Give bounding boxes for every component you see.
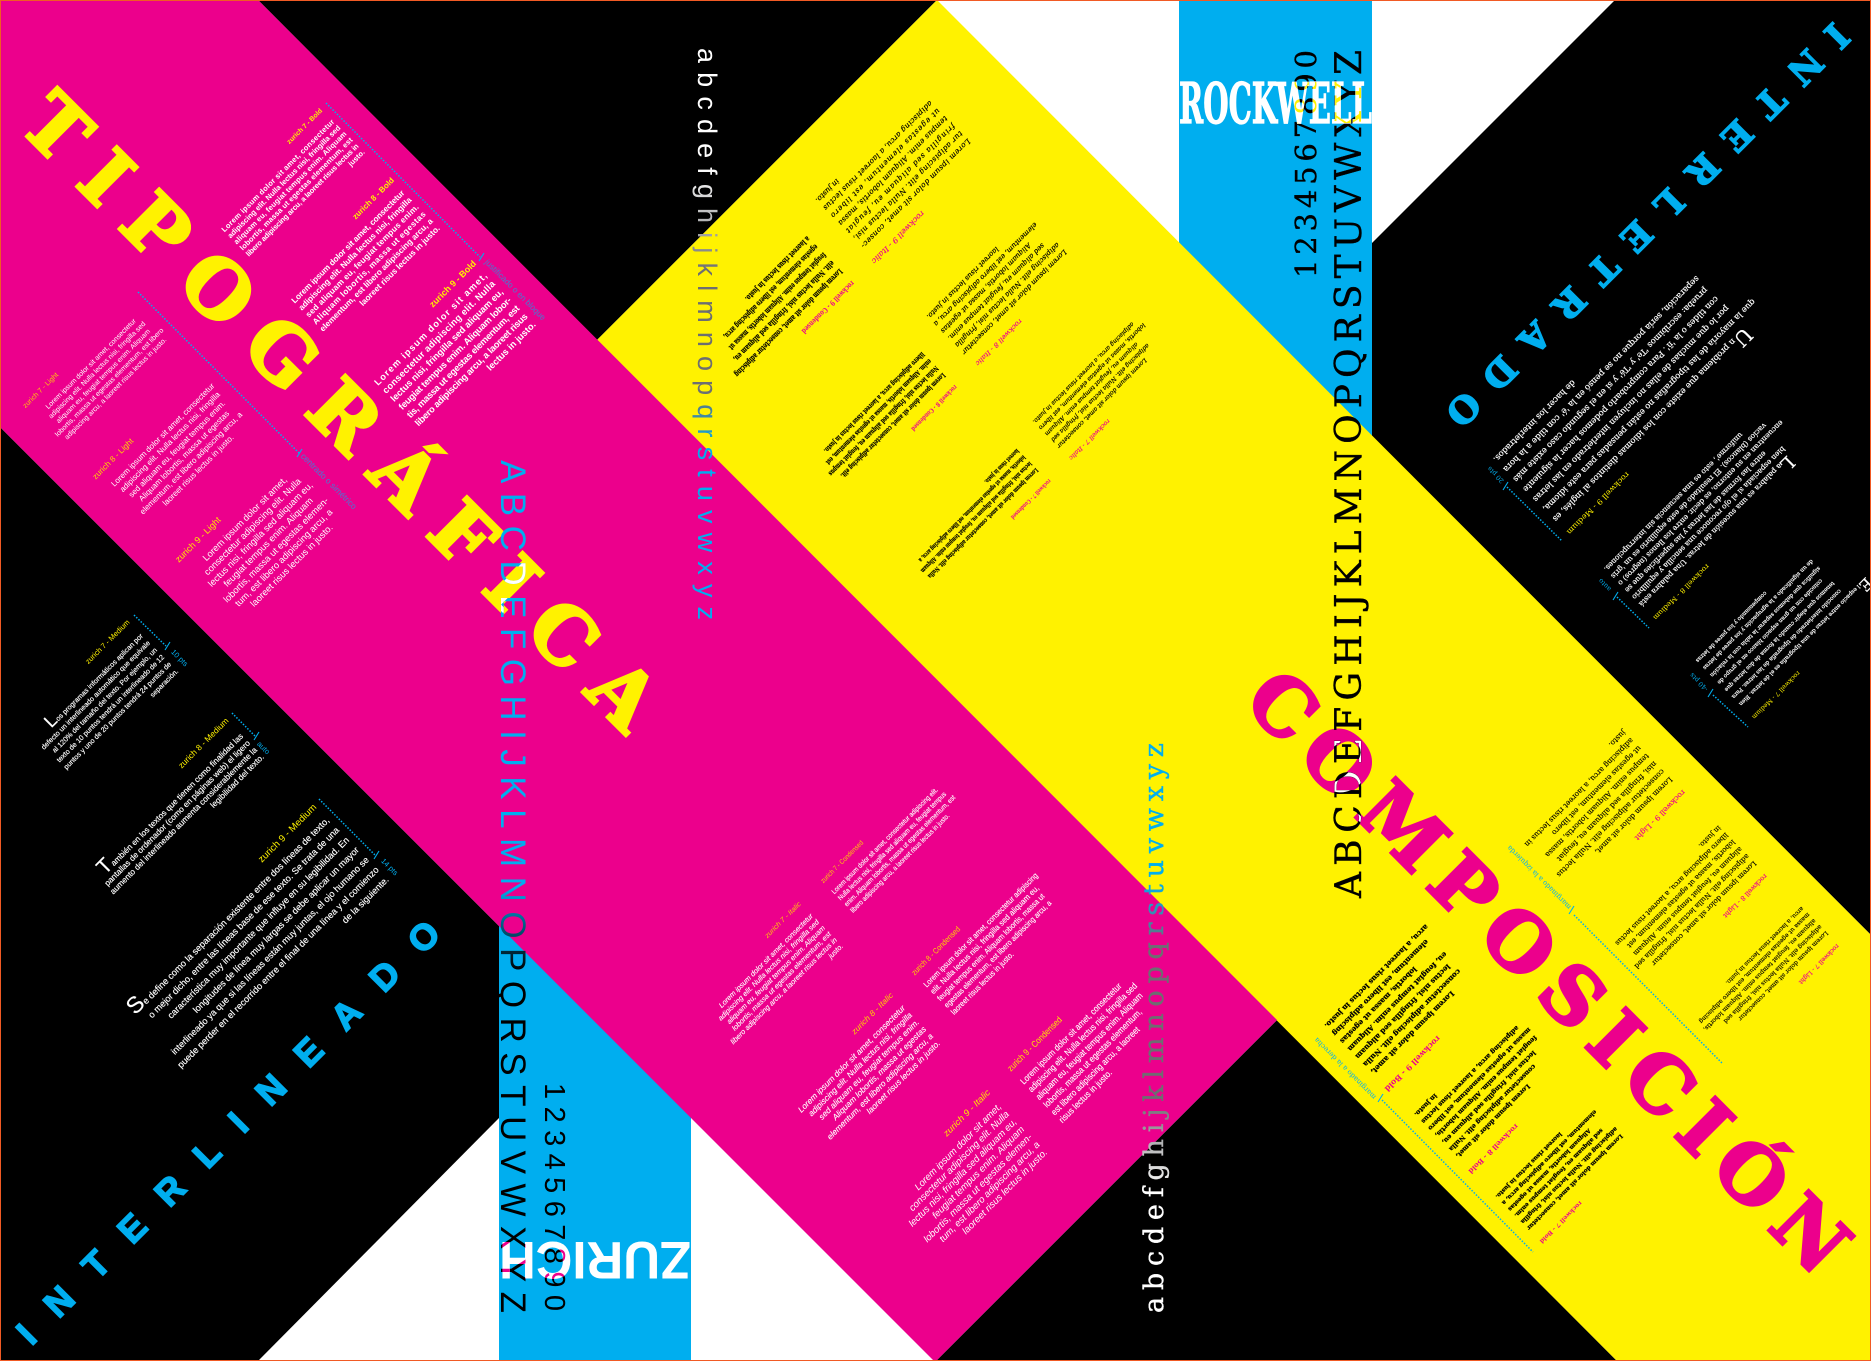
label: 20 pts: 20 pts [1486, 465, 1506, 485]
text block: zurich 9 italic [891, 1101, 1050, 1260]
label: zurich 9 medium: zurich 9 - Medium [256, 802, 319, 865]
text block: rockwell 9 condensed [700, 234, 844, 379]
text block: rockwell 8 light: Lorem ipsum dolor sit amet, consectetur [1649, 859, 1758, 968]
blue bar: zurich [499, 920, 691, 1361]
text block: zurich 8 condensed: Lorem ipsum dolor sit amet, consectetur adipiscing [922, 871, 1040, 989]
label: zurich 8 italic: zurich 8 - Italic [849, 991, 895, 1037]
text block: rockwell 9 medium: que la mayoría de las tipografías no están pensadas para este idioma, [1541, 297, 1758, 514]
text block: zurich 9 medium: interlineado ya que si las líneas están muy juntas, el ojo humano se [169, 855, 371, 1057]
overlap: rockwell characters: ABCDEFGHIJKLMNOPQRSTUVWXYZ [1329, 50, 1370, 899]
text block: rockwell 7 bold: sed aliquam eu, feugiat tempus enim. [1513, 1127, 1604, 1218]
label: auto: auto [255, 739, 272, 756]
text block: zurich 8 light [109, 381, 252, 524]
text block: rockwell 8 italic: adipiscing elit. Nulla lectus nisi, fringilla [953, 241, 1061, 349]
label: zurich 8 condensed: zurich 8 - Condensed [910, 925, 962, 977]
text block: rockwell 9 condensed: Lorem ipsum dolor sit amet, consectetur adipiscing [732, 267, 844, 379]
text block: rockwell 7 light: massa ut egestas elementum, est libero adipiscing [1697, 911, 1811, 1025]
text block: zurich 7 medium: Los programas informáticos aplican por [40, 632, 145, 731]
text block: rockwell 7 medium: coincide con un gran espacio blanco en el grupo de [1715, 577, 1823, 685]
text block: rockwell 8 medium: vacíos (blancos). El resultado de este equilibrio es un 'gris [1609, 420, 1769, 581]
panel: interletrado [1372, 0, 1871, 935]
overlap: zurich characters [502, 1242, 566, 1279]
label: rockwell 8 medium: rockwell 8 - Medium [1651, 562, 1711, 622]
text block: zurich 7 medium: al 120% del tamaño del texto. Por ejemplo, un [51, 646, 159, 755]
text block: rockwell 8 condensed: Nulla lectus nisi, fringilla sed aliquam eu, feugiat tempus [827, 364, 941, 478]
text block: rockwell 8 bold: massa ut egestas elementum, est libero [1426, 1026, 1533, 1132]
text block: zurich 7 medium: texto de 10 puntos tendrá un interlineado de 12 [55, 653, 166, 764]
title: rockwell: ROCKWELL [1179, 71, 1372, 137]
text block: zurich 9 bold: tis, massa ut egestas elementum, est [405, 303, 522, 420]
text block: rockwell 9 bold [1323, 923, 1477, 1077]
text block: zurich 7 italic: Lorem ipsum dolor sit amet, consectetur [717, 911, 815, 1010]
measure: 10 pts [134, 615, 170, 650]
text block: zurich 7 italic: justo. [826, 942, 845, 961]
text block: rockwell 7 italic [1030, 316, 1165, 450]
alphabet: zurich uppercase: ABCDEFGHIJKLMNOPQRSTUVWXYZ [493, 460, 532, 1313]
text block: rockwell 9 light: nisi, fringilla sed aliquam eu, feugiat [1555, 759, 1659, 863]
measure: marginado a la izquierda [1569, 906, 1722, 1063]
text block: zurich 7 italic: libero adipiscing arcu, a laoreet risus lectus in [728, 936, 839, 1046]
overlap: uppercase over tipográfica: ABCDEFGHIJKLMNOPQRSTUVWXYZ [493, 460, 532, 1313]
label: zurich 7 condensed: zurich 7 - Condensed [820, 840, 865, 885]
text block: zurich 8 condensed: elit. Nulla lectus nisi, fringilla sed aliquam eu, [929, 884, 1041, 996]
heading: composición: COMPOSICIÓN [1228, 652, 1868, 1292]
overlap: zurich characters: ABCDEFGHIJKLMNOPQRSTUVWXYZ [493, 460, 532, 1313]
text block: zurich 8 bold: elementum, est libero adipiscing arcu, a [317, 216, 435, 333]
text block: rockwell 8 medium: bien espaciada si el ojo reconoce una sencilla y equilibrio [1630, 445, 1787, 602]
text block: zurich 7 condensed: enim. Aliquam lobortis, massa ut egestas elementum, est [843, 794, 957, 908]
text block: zurich 9 medium: o mejor dicho, entre las líneas base de ese texto. Se trata de una [146, 825, 342, 1020]
text block: zurich 7 medium [26, 625, 181, 780]
text block: rockwell 8 italic [924, 212, 1069, 356]
text block: rockwell 9 condensed: a laoreet risus lectus in justo. [743, 234, 812, 303]
text block: zurich 8 light: adipiscing elit. Nulla lectus nisi, fringilla [118, 390, 222, 494]
text block: zurich 9 bold [372, 270, 538, 436]
text block: rockwell 7 bold: adipiscing elit. Nulla lectus nisi, fringilla [1519, 1125, 1618, 1224]
label: zurich 7 italic: zurich 7 - Italic [763, 901, 803, 941]
text block: zurich 7 italic: adipiscing elit. Nulla lectus nisi, fringilla sed [716, 917, 822, 1023]
measure: -40 pts [1708, 689, 1748, 727]
text block: zurich 7 condensed: Nulla lectus nisi, fringilla sed aliquam eu, feugiat tempus [837, 791, 948, 902]
text block: zurich 8 light: Aliquam lobortis, massa ut egestas [137, 409, 231, 503]
label: justificado o en bloque: justificado o en bloque [482, 256, 548, 322]
text block: rockwell 7 condensed: laoreet risus in justo. [983, 447, 1020, 485]
measure: 20 pts [1503, 482, 1562, 541]
text block: rockwell 9 medium: de hacer los interletrados. [1491, 378, 1578, 465]
panel: interlineado [0, 427, 499, 1361]
text block: zurich 7 bold: Lorem ipsum dolor sit amet, consectetur [220, 117, 336, 234]
text block: rockwell 8 medium [1602, 404, 1813, 615]
label: zurich 8 light: zurich 8 - Light [91, 436, 136, 481]
text block: zurich 8 italic: Aliquam lobortis, massa ut egestas [829, 1024, 928, 1123]
text block: rockwell 9 bold: elementum, est libero adipiscing [1330, 938, 1431, 1038]
heading: tipográfica: TIPOGRÁFICA [3, 75, 678, 750]
text block: zurich 7 condensed: libero adipiscing arcu, a laoreet risus lectus in justo. [850, 813, 951, 914]
text block: rockwell 8 condensed: Lorem ipsum dolor sit amet, consectetur adipiscing elit. [839, 371, 948, 480]
label: rockwell 7 medium: rockwell 7 - Medium [1750, 669, 1801, 720]
text block: zurich 8 medium: aumento del interlineado aumenta considerablemente la [108, 745, 259, 896]
text block: rockwell 8 light: adipiscing elit. Nulla lectus nisi, fringilla sed [1632, 852, 1751, 971]
measure: 14 pts [319, 799, 379, 859]
text block: rockwell 9 bold: consectetur adipiscing elit. Nulla [1361, 967, 1463, 1069]
label: zurich 7 bold: zurich 7 - Bold [286, 108, 324, 146]
text block: rockwell 9 italic: adipiscing arcu, a laoreet risus lectus [821, 99, 934, 212]
text block: rockwell 8 medium: La palabra es una sucesión de letras. Una palabra está [1637, 451, 1799, 609]
text block: zurich 7 condensed: Lorem ipsum dolor sit amet, consectetur adipiscing elit. [831, 787, 940, 896]
overlap: rockwell characters [1294, 82, 1361, 124]
text block: zurich 9 condensed: adipiscing elit. Nulla lectus nisi, fringilla sed [1026, 981, 1139, 1094]
text block: rockwell 9 light [1515, 728, 1675, 888]
label: zurich 7 light: zurich 7 - Light [22, 372, 60, 410]
text block: zurich 8 medium: legibilidad del texto. [209, 753, 266, 810]
text block: zurich 9 condensed: Lorem ipsum dolor sit amet, consectetur [1018, 981, 1124, 1086]
text block: zurich 8 condensed: laoreet risus lectus in justo. [949, 950, 1016, 1017]
text block: rockwell 9 bold: lectus nisi, fringilla sed aliquam [1353, 962, 1452, 1061]
measure: centrado o simétrico [138, 292, 302, 457]
measure: marginado a la derecha [1378, 1094, 1533, 1252]
alphabet: rockwell lowercase: abcdefghijklmnopqrstuvwxyz [1139, 743, 1170, 1313]
text block: zurich 9 condensed: lobortis, massa ut egestas elementum, [1041, 1007, 1144, 1109]
text block: zurich 7 light [36, 309, 172, 445]
text block: rockwell 9 light: tempus enim. Aliquam lobortis, massa [1543, 752, 1651, 860]
text block: rockwell 9 condensed: egestas elementum, est libero adipiscing arcu, [722, 243, 820, 341]
panel: composición [597, 0, 1871, 1361]
text block: zurich 9 italic: lectus nisi, fringilla sed aliquam eu, [907, 1117, 1019, 1229]
text block: rockwell 9 medium: con tildes o la 'ñ'. Para comprobarlo podemos hacer la siguiente [1521, 294, 1721, 494]
text block: rockwell 8 condensed [813, 350, 948, 485]
text block: zurich 7 medium: defecto un interlineado automático que equivale [40, 639, 152, 751]
text block: zurich 9 medium: Se define como la separación existente entre dos líneas de texto, [120, 815, 331, 1019]
text block: rockwell 9 italic [813, 91, 973, 250]
text block: rockwell 9 light: adipiscing arcu, a laoreet risus lectus in [1523, 736, 1636, 849]
text block: zurich 9 bold: consectetur adipiscing elit. Nulla [380, 278, 498, 396]
numerals: rockwell: 1234567890 [1289, 50, 1323, 278]
text block: zurich 8 light: Lorem ipsum dolor sit amet, consectetur [109, 381, 217, 488]
text block: zurich 9 italic: consectetur adipiscing elit. Nulla [907, 1109, 1012, 1214]
text block: zurich 7 bold [220, 117, 367, 264]
heading: interletrado: INTERLETRADO [1437, 14, 1857, 434]
text block: rockwell 9 medium [1491, 248, 1775, 532]
text block: zurich 8 bold [289, 187, 442, 341]
text block: zurich 9 medium: puede perder en el recorrido entre el final de una línea y el comienzo [175, 865, 381, 1070]
text block: zurich 7 italic: lobortis, massa ut egestas elementum, est [730, 929, 834, 1033]
text block: zurich 8 italic: Lorem ipsum dolor sit amet, consectetur [796, 1002, 908, 1114]
panel: tipográfica [0, 0, 1277, 1361]
label: zurich 9 italic: zurich 9 - Italic [940, 1087, 993, 1139]
text block: rockwell 7 italic: adipiscing elit. Nulla lectus nisi, fringilla sed [1049, 342, 1151, 443]
text block: rockwell 7 medium: compensando y los pares de letras [1694, 590, 1768, 663]
text block: rockwell 7 condensed: Lorem ipsum dolor sit amet, consectetur adipiscing elit. Nulla [926, 466, 1039, 579]
text block: rockwell 7 medium: de un significado a la agrupación y los pares de letras [1701, 558, 1815, 671]
label: zurich 7 medium: zurich 7 - Medium [83, 618, 132, 666]
text block: rockwell 9 medium: prueba: escribimos 'Te' y 'Té' y si en el segundo caso existe más [1511, 285, 1710, 484]
label: rockwell 9 condensed: rockwell 9 - Condensed [799, 279, 856, 336]
text block: rockwell 9 light: consectetur adipiscing elit. Nulla lectus [1555, 767, 1667, 879]
text block: zurich 7 medium: separación. [149, 668, 180, 699]
text block: rockwell 9 bold: eu, feugiat tempus enim. Aliquam [1346, 950, 1449, 1054]
text block: rockwell 8 italic: sed aliquam eu, feugiat tempus enim. [946, 242, 1046, 342]
text block: zurich 7 light: adipiscing arcu, a laoreet risus lectus in justo. [64, 337, 168, 441]
text block: rockwell 9 italic: in justo. [814, 177, 841, 205]
text block: zurich 8 bold: laoreet risus lectus in justo. [357, 223, 442, 308]
label: rockwell 8 light: rockwell 8 - Light [1721, 872, 1769, 920]
text block: rockwell 8 bold: Lorem ipsum dolor sit amet, [1454, 1082, 1532, 1160]
text block: rockwell 7 bold: laoreet risus lectus in justo. [1494, 1130, 1562, 1199]
measure: justificado o en bloque [326, 103, 484, 261]
text block: rockwell 7 bold [1493, 1100, 1624, 1231]
text block: zurich 8 italic: sed aliquam eu, feugiat tempus enim. [817, 1017, 921, 1122]
text block: rockwell 7 light [1689, 905, 1829, 1045]
text block: rockwell 9 italic: ut egestas elementum, est libero [829, 107, 942, 220]
text block: rockwell 7 condensed: lobortis, massa ut egestas elementum, est libero adipiscing arcu, a [917, 454, 1027, 563]
label: rockwell 9 italic: rockwell 9 - Italic [869, 209, 926, 266]
text block: rockwell 8 bold: lectus nisi, fringilla sed aliquam eu, [1440, 1049, 1537, 1146]
text block: rockwell 9 bold: lobortis, massa ut egestas [1338, 965, 1419, 1046]
text block: rockwell 7 italic: Lorem ipsum dolor sit amet, consectetur [1055, 356, 1149, 450]
text block: zurich 8 condensed: feugiat tempus enim. Aliquam lobortis, massa ut [935, 891, 1047, 1003]
text block: zurich 8 bold: sed aliquam eu, feugiat tempus enim. [303, 202, 421, 319]
text block: rockwell 8 light: in justo. [1697, 824, 1722, 850]
text block: rockwell 8 bold: consectetur adipiscing elit. Nulla [1447, 1063, 1537, 1153]
text block: zurich 7 bold: adipiscing elit. Nulla lectus nisi, fringilla sed [226, 123, 343, 240]
text block: zurich 9 bold: lectus in justo. [485, 320, 538, 373]
label: 10 pts: 10 pts [169, 647, 190, 668]
text block: rockwell 7 medium: significa que debemos separar la tabla con la relación [1708, 565, 1822, 679]
text block: zurich 8 light: elementum, est libero adipiscing arcu, a [138, 410, 245, 516]
text block: zurich 9 bold: libero adipiscing arcu, a laoreet risus [413, 311, 530, 428]
label: zurich 9 light: zurich 9 - Light [173, 514, 223, 564]
text block: rockwell 7 italic: lobortis, massa ut egestas elementum, est libero [1037, 322, 1146, 431]
label: rockwell 9 bold: rockwell 9 - Bold [1383, 1034, 1443, 1094]
black triangle: top centre [258, 0, 937, 340]
label: rockwell 7 condensed: rockwell 7 - Condensed [1009, 477, 1052, 521]
text block: zurich 9 light [190, 464, 346, 620]
overlap: uppercase over composición: ABCDEFGHIJKLMNOPQRSTUVWXYZ [1329, 50, 1370, 899]
text block: rockwell 9 italic: fringilla sed aliquam eu, feugiat [844, 121, 958, 235]
text block: zurich 8 italic [796, 1002, 943, 1149]
text block: rockwell 8 italic: Aliquam lobortis, massa ut egestas [939, 241, 1033, 335]
text block: rockwell 9 italic: Lorem ipsum dolor sit amet, consec- [859, 136, 973, 250]
label: rockwell 7 bold: rockwell 7 - Bold [1537, 1199, 1583, 1245]
text block: rockwell 8 italic: elementum, est libero adipiscing arcu, a [932, 221, 1039, 328]
text block: rockwell 7 condensed [906, 447, 1039, 580]
text block: rockwell 8 condensed: enim. Aliquam lobortis, massa ut egestas elementum, est [824, 357, 934, 467]
text block: zurich 8 bold: adipiscing elit. Nulla lectus nisi, fringilla [296, 195, 414, 312]
text block: zurich 9 italic: feugiat tempus enim. Aliquam [930, 1124, 1027, 1221]
text block: zurich 8 medium: pantallas de ordenador (como en páginas web) el ligero [103, 738, 252, 888]
text block: rockwell 9 italic: tur adipiscing elit. Nulla lectus nisi, [852, 129, 965, 243]
text block: rockwell 9 light: justo. [1607, 728, 1628, 749]
text block: zurich 7 italic: aliquam eu, feugiat tempus enim. Aliquam [725, 924, 827, 1026]
text block: zurich 9 light: tum, est libero adipiscing arcu, a [233, 506, 335, 608]
text block: zurich 9 light: feugiat tempus enim. Aliquam [222, 495, 315, 589]
label: rockwell 9 medium: rockwell 9 - Medium [1565, 470, 1631, 536]
text block: rockwell 9 bold: arcu, a laoreet risus lectus in justo. [1323, 923, 1430, 1030]
label: zurich 8 medium: zurich 8 - Medium [176, 716, 231, 770]
overlap: zurich characters: 1234567890 [538, 1083, 570, 1311]
text block: zurich 8 bold: Aliquam lobortis, massa ut egestas [310, 209, 428, 326]
label: rockwell 8 italic: rockwell 8 - Italic [973, 317, 1024, 368]
text block: zurich 9 italic: laoreet risus lectus in justo. [960, 1147, 1050, 1237]
text block: zurich 7 bold: justo. [345, 148, 367, 169]
label: rockwell 9 light: rockwell 9 - Light [1633, 788, 1687, 843]
text block: rockwell 7 light: aliquam eu, feugiat tempus enim. Aliquam lobortis, [1702, 917, 1817, 1033]
text block: rockwell 9 light: ut egestas elementum, est libero [1550, 744, 1643, 838]
text block: zurich 9 condensed: risus lectus in justo. [1057, 1068, 1114, 1125]
blue bar: rockwell [1179, 0, 1372, 440]
text block: rockwell 7 bold: elementum, est libero adipiscing arcu, a [1500, 1108, 1597, 1206]
text block: zurich 7 bold: aliquam eu, feugiat tempus enim. Aliquam [232, 129, 349, 246]
label: rockwell 7 light: rockwell 7 - Light [1797, 942, 1840, 986]
text block: zurich 8 light: sed aliquam eu, feugiat tempus enim. [127, 399, 227, 499]
measure: auto [1613, 592, 1649, 628]
text block: zurich 8 italic: adipiscing elit. Nulla lectus nisi, fringilla [806, 1010, 914, 1118]
text block: zurich 7 medium: puntos y uno de 20 puntos tendrá 24 puntos de [62, 660, 173, 771]
text block: rockwell 9 italic: tempus enim. Aliquam lobortis, massa [836, 114, 950, 227]
text block: rockwell 9 light: Lorem ipsum dolor sit amet, [1593, 775, 1674, 856]
text block: rockwell 8 light: libero adipiscing arcu, a laoreet risus lectus [1613, 831, 1730, 947]
text block: rockwell 8 italic: Lorem ipsum dolor sit amet, consectetur [960, 247, 1069, 356]
text block: rockwell 8 light: aliquam eu, feugiat tempus enim. Aliquam [1631, 845, 1744, 957]
text block: rockwell 8 medium: entre las formas de las letras y las superficies que se [1623, 449, 1768, 595]
text block: rockwell 9 medium: separación, sería porque no se pensó en la 'é' con tilde a la hora [1501, 274, 1702, 474]
title: zurich: ZURICH [499, 1230, 691, 1289]
label: zurich 9 bold: zurich 9 - Bold [427, 258, 478, 309]
text block: zurich 8 medium: También en los textos que tienen como finalidad las [92, 732, 245, 879]
text block: rockwell 7 medium: tenemos que elegir cuando la forma de dos letras que [1722, 580, 1835, 693]
text block: rockwell 8 bold: adipiscing arcu, a laoreet risus lectus [1419, 1024, 1521, 1125]
text block: zurich 9 light: lobortis, massa ut egestas elemen- [221, 495, 330, 604]
text block: rockwell 9 medium: Un problema que existe con los idiomas distintos al inglés, es [1551, 323, 1758, 524]
text block: zurich 7 light: Lorem ipsum dolor sit amet, consectetur [45, 317, 138, 411]
label: rockwell 7 italic: rockwell 7 - Italic [1067, 417, 1111, 462]
text block: zurich 9 medium: característica muy importante que influye en su legibilidad. En [166, 835, 351, 1021]
black triangle: bottom centre [936, 1020, 1617, 1361]
text block: rockwell 7 italic: adipiscing arcu, a laoreet risus lectus in justo. [1031, 321, 1135, 425]
text block: zurich 7 italic [704, 911, 846, 1052]
overlap: rockwell characters: 1234567890 [1289, 50, 1323, 278]
text block: zurich 9 light: Lorem ipsum dolor sit amet, [201, 475, 289, 563]
label: 14 pts: 14 pts [379, 856, 400, 877]
text block: rockwell 9 bold: Lorem ipsum dolor sit amet, [1369, 989, 1456, 1076]
text block: zurich 8 italic: laoreet risus lectus in justo. [864, 1038, 942, 1116]
text block: zurich 9 light: consectetur adipiscing elit. Nulla [202, 476, 304, 577]
alphabet: zurich lowercase: abcdefghijklmnopqrstuvwxyz [692, 48, 722, 620]
text block: rockwell 8 bold: feugiat tempus enim. Aliquam lobortis, [1433, 1034, 1539, 1139]
text block: rockwell 8 condensed: libero adipiscing arcu, a laoreet risus lectus in justo. [822, 350, 927, 455]
text block: rockwell 7 italic: aliquam eu, feugiat tempus enim. Aliquam [1043, 341, 1139, 437]
text block: rockwell 8 bold: in justo. [1413, 1092, 1439, 1118]
alphabet: rockwell uppercase: ABCDEFGHIJKLMNOPQRSTUVWXYZ [1329, 50, 1370, 899]
text block: rockwell 8 medium: uniforme', esto es una secuencia sin interrupciones. [1602, 431, 1745, 574]
label: rockwell 8 condensed: rockwell 8 - Condensed [909, 383, 959, 433]
text block: rockwell 7 medium: conocido interletrado de tipografía de las letras. Para [1730, 588, 1843, 701]
text block: zurich 7 light: adipiscing elit. Nulla lectus nisi, fringilla sed [48, 321, 147, 420]
label: auto: auto [1597, 577, 1613, 593]
text block: rockwell 8 bold [1412, 1012, 1560, 1160]
text block: zurich 7 light: aliquam eu, feugiat tempus enim. Aliquam [55, 328, 152, 425]
text block: rockwell 7 light: Lorem ipsum dolor sit amet, consectetur [1737, 929, 1829, 1022]
text block: zurich 9 italic: tum, est libero adipiscing arcu, a [937, 1140, 1042, 1245]
text block: zurich 9 bold: lectus nisi, fringilla sed aliquam eu, [389, 287, 505, 404]
label: rockwell 8 bold: rockwell 8 - Bold [1467, 1122, 1520, 1176]
label: centrado o simétrico: centrado o simétrico [299, 451, 359, 511]
text block: zurich 8 condensed: egestas elementum, est libero adipiscing arcu, a [942, 898, 1054, 1010]
text block: rockwell 7 bold: Aliquam lobortis, massa ut egestas [1506, 1126, 1592, 1212]
text block: zurich 9 bold: feugiat tempus enim. Aliquam lobor- [397, 295, 513, 412]
text block: zurich 9 italic: Lorem ipsum dolor sit amet, [913, 1101, 1004, 1193]
text block: zurich 9 condensed: est libero adipiscing arcu, a laoreet [1049, 1024, 1142, 1117]
text block: zurich 8 italic: elementum, est libero adipiscing arcu, a [825, 1031, 935, 1141]
text block: zurich 7 light: lobortis, massa ut egestas elementum, est libero [54, 327, 165, 438]
text block: zurich 9 condensed: aliquam eu, feugiat tempus enim. Aliquam [1034, 991, 1145, 1102]
text block: rockwell 7 bold: Lorem ipsum dolor sit amet, consectetur [1525, 1133, 1623, 1231]
text block: zurich 9 medium [117, 805, 391, 1080]
measure: auto [232, 713, 259, 740]
text block: zurich 9 light: lectus nisi, fringilla sed aliquam eu, [206, 480, 315, 589]
label: zurich 8 bold: zurich 8 - Bold [351, 176, 396, 221]
text block: zurich 9 medium: de la siguiente. [340, 875, 391, 925]
label: marginado a la derecha: marginado a la derecha [1313, 1036, 1378, 1101]
text block: zurich 9 bold: Lorem ipsum dolor sit amet, [372, 271, 489, 387]
label: marginado a la izquierda: marginado a la izquierda [1506, 844, 1573, 911]
text block: zurich 9 medium: longitudes de línea muy largas se debe aplicar un mayor [191, 845, 361, 1015]
text block: zurich 9 condensed [1018, 973, 1170, 1125]
text block: rockwell 7 light: adipiscing elit. Nulla lectus nisi, fringilla sed [1722, 923, 1823, 1025]
label: -40 pts: -40 pts [1688, 671, 1710, 693]
text block: rockwell 8 italic: laoreet risus lectus in justo. [925, 245, 1000, 320]
text block: zurich 7 bold: libero adipiscing arcu, a laoreet risus lectus in [244, 141, 361, 258]
text block: rockwell 7 condensed: lectus nisi, fringilla sed aliquam eu, feugiat tempus enim. Aliquam [919, 460, 1033, 574]
text block: rockwell 8 light [1604, 824, 1758, 978]
text block: rockwell 9 condensed: feugiat tempus enim. Aliquam lobortis, massa ut [727, 251, 828, 352]
text block: zurich 9 italic: lobortis, massa ut egestas elemen- [922, 1132, 1035, 1245]
text block: rockwell 9 condensed: elit. Nulla lectus nisi, fringilla sed aliquam eu, [732, 259, 836, 363]
heading: interlineado: INTERLINEADO [8, 912, 448, 1352]
text block: rockwell 7 medium [1694, 532, 1871, 715]
text block: rockwell 8 light: lobortis, massa ut egestas elementum, est [1625, 838, 1737, 949]
text block: zurich 8 light: laoreet risus lectus in justo. [161, 433, 236, 508]
numerals: zurich: 1234567890 [538, 1083, 570, 1311]
text block: zurich 9 light: laoreet risus lectus in justo. [248, 522, 335, 609]
label: zurich 9 condensed: zurich 9 - Condensed [1005, 1015, 1064, 1073]
text block: rockwell 9 medium: por lo que muchas de ellas no incluyen interletrado en las letras [1531, 304, 1732, 504]
text block: zurich 8 bold: Lorem ipsum dolor sit amet, consectetur [289, 187, 407, 305]
text block: zurich 7 bold: lobortis, massa ut egestas elementum, est [238, 135, 355, 252]
text block: rockwell 8 medium: encuentran en su entorno, es decir, entre los llenos (negros) o [1616, 418, 1785, 588]
text block: rockwell 7 light: arcu, a laoreet risus lectus in justo. [1724, 905, 1805, 986]
